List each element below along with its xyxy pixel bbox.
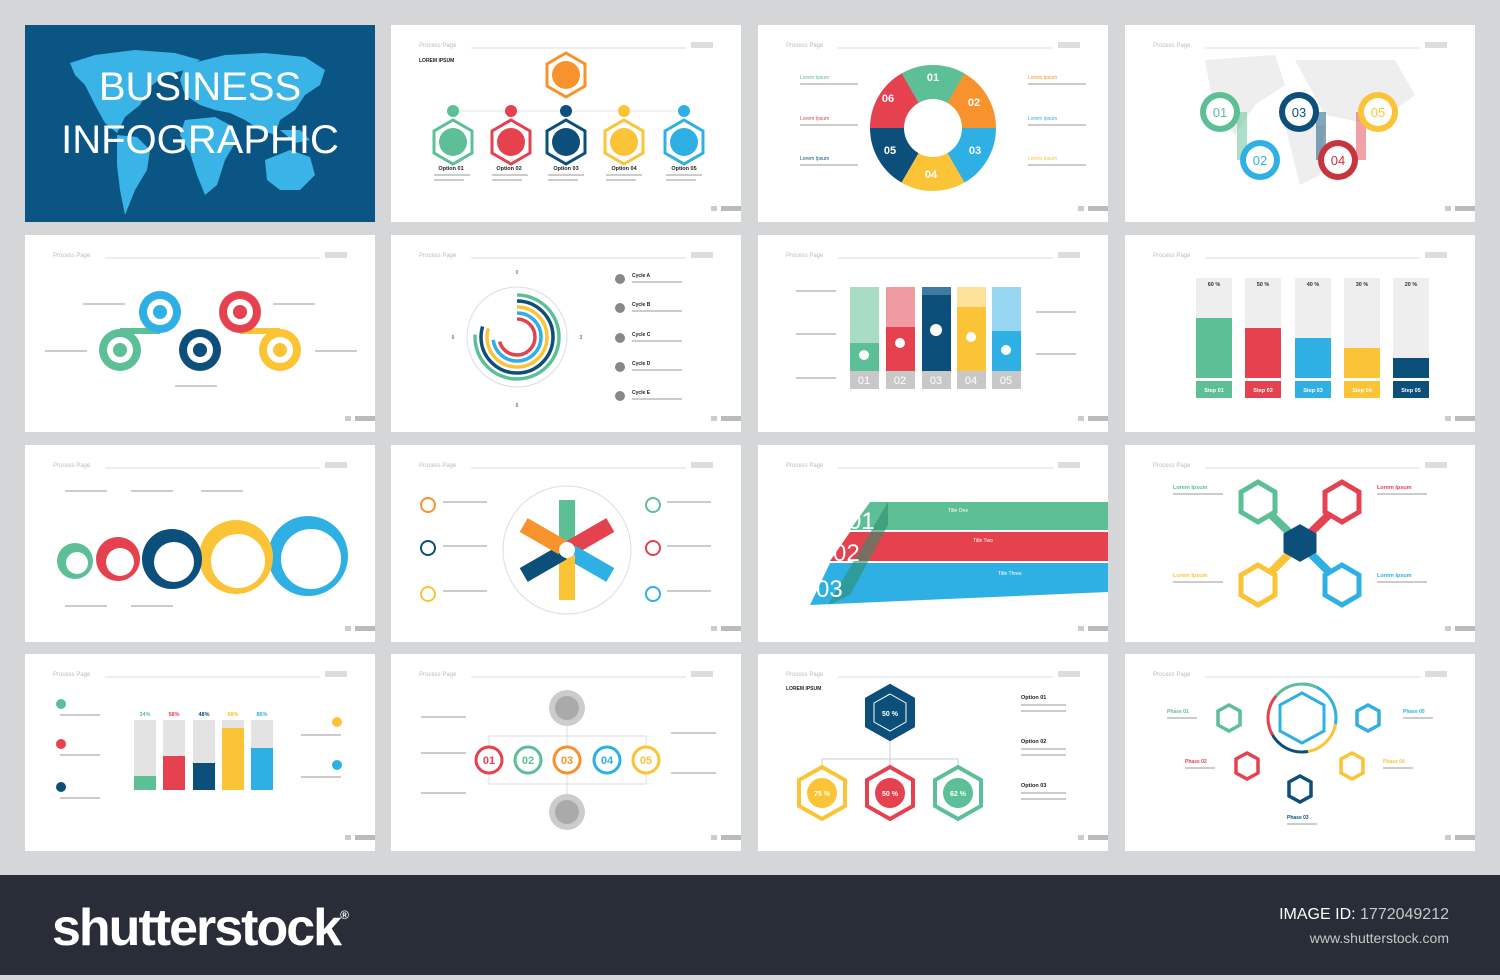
slide 16: phase hexagons: Phase 04 <box>1383 759 1405 765</box>
bars <box>1196 278 1429 378</box>
side texts: Lorem Ipsum <box>800 75 829 81</box>
slide 4: map circles: Process Page <box>1153 43 1191 49</box>
slide 13: bar chart: Process Page <box>53 672 91 678</box>
numbered circles: 05 <box>640 755 652 767</box>
slide 8: step bars: 50 % <box>1257 282 1269 288</box>
hexagons: 62 % <box>950 791 967 798</box>
slide 15: percentage hexagons <box>758 654 1108 851</box>
slide 13: bar chart: 34% <box>139 712 151 718</box>
slide 3: cycle ring <box>758 25 1108 222</box>
top hexagon <box>547 53 585 97</box>
segment numbers: 03 <box>969 145 981 157</box>
slide 1: title <box>25 25 375 222</box>
bars <box>134 720 273 790</box>
slide 3: cycle ring: Lorem Ipsum <box>800 156 829 162</box>
slide 8: step bars: Step 02 <box>1253 388 1273 394</box>
slide 11: pyramid ribbons: 03 <box>816 576 843 603</box>
slide 16: phase hexagons: Phase 05 <box>1403 709 1425 715</box>
option labels: Option 05 <box>671 166 697 172</box>
slide 6: radial cycles: 3 <box>580 335 583 341</box>
segment numbers: 01 <box>927 72 939 84</box>
slide 11: pyramid ribbons: Title Two <box>973 538 993 544</box>
option labels <box>438 166 697 172</box>
slide 15: percentage hexagons: Option 03 <box>1021 783 1046 789</box>
cycle list: Cycle A <box>632 273 651 279</box>
slide 11: pyramid ribbons: Process Page <box>786 463 824 469</box>
slide 12: cross hexagons: Lorem Ipsum <box>1377 485 1412 491</box>
slide 12: cross hexagons: Lorem Ipsum <box>1377 573 1412 579</box>
slide 8: step bars: Step 04 <box>1352 388 1373 394</box>
slide 2: options hexagons: Process Page <box>419 43 457 49</box>
step labels <box>1196 381 1429 398</box>
hexagons: 50 % <box>882 711 899 718</box>
option labels: Option 02 <box>496 166 522 172</box>
slide 2: options hexagons: LOREM IPSUM <box>419 58 454 64</box>
slide 3: cycle ring: Process Page <box>786 43 824 49</box>
slide 3: cycle ring: Lorem Ipsum <box>800 116 829 122</box>
slide 9: growing circles <box>25 445 375 642</box>
slide 8: step bars: Process Page <box>1153 253 1191 259</box>
slide 8: step bars: 40 % <box>1307 282 1319 288</box>
slide 15: percentage hexagons: LOREM IPSUM <box>786 686 821 692</box>
world map <box>70 50 325 215</box>
slide 7: column bars <box>758 235 1108 432</box>
slide 14: numbered circles row: Process Page <box>419 672 457 678</box>
slide 15: percentage hexagons: Option 02 <box>1021 739 1046 745</box>
hexagons <box>1241 482 1359 605</box>
slide 15: percentage hexagons: Option 01 <box>1021 695 1046 701</box>
gray circles <box>549 690 585 830</box>
slide 11: pyramid ribbons: 02 <box>833 540 860 567</box>
slide 16: phase hexagons: Phase 02 <box>1185 759 1207 765</box>
slide 1: title: INFOGRAPHIC <box>61 118 339 162</box>
ring segments <box>870 65 996 191</box>
slide 8: step bars: 60 % <box>1208 282 1220 288</box>
slide 8: step bars: Step 05 <box>1401 388 1421 394</box>
slide 5: chain circles <box>25 235 375 432</box>
slide 13: bar chart: 48% <box>198 712 210 718</box>
title text: BUSINESS <box>99 65 301 109</box>
cycle list <box>632 273 651 396</box>
numbered circles: 05 <box>1371 105 1385 120</box>
slide 5: chain circles: Process Page <box>53 253 91 259</box>
slide 2: options hexagons <box>391 25 741 222</box>
numbered circles: 02 <box>522 755 534 767</box>
slide 7: column bars: 05 <box>1000 375 1012 387</box>
chain <box>99 291 301 371</box>
segment numbers: 05 <box>884 145 896 157</box>
slide 8: step bars: Step 01 <box>1204 388 1224 394</box>
bars <box>850 287 1021 371</box>
numbered circles: 03 <box>1292 105 1306 120</box>
hexagons <box>799 686 981 819</box>
numbered circles: 04 <box>601 755 614 767</box>
numbered circles: 02 <box>1253 153 1267 168</box>
slide 6: radial cycles <box>391 235 741 432</box>
cycle list: Cycle B <box>632 302 651 308</box>
slide 12: cross hexagons <box>1125 445 1475 642</box>
slide 8: step bars: Step 03 <box>1303 388 1323 394</box>
option labels: Option 03 <box>553 166 579 172</box>
slide 3: cycle ring: Lorem Ipsum <box>1028 156 1057 162</box>
slide 10: star objects: Process Page <box>419 463 457 469</box>
slide 16: phase hexagons: Phase 01 <box>1167 709 1189 715</box>
slide 6: radial cycles: 9 <box>452 335 455 341</box>
image id: IMAGE ID: 1772049212 <box>1279 906 1449 923</box>
segment numbers: 02 <box>968 97 980 109</box>
logo: ® <box>340 908 349 922</box>
numbered circles <box>1200 92 1398 180</box>
option labels: Option 04 <box>611 166 638 172</box>
concentric arcs <box>467 287 567 387</box>
star <box>520 500 614 600</box>
slide 13: bar chart: 86% <box>256 712 268 718</box>
slide 3: cycle ring: Lorem Ipsum <box>1028 116 1057 122</box>
slide 12: cross hexagons: Lorem Ipsum <box>1173 573 1208 579</box>
segment numbers: 06 <box>882 93 894 105</box>
slide 7: column bars: 01 <box>858 375 870 387</box>
numbered circles: 03 <box>561 755 573 767</box>
slide 11: pyramid ribbons: Title One <box>948 508 968 514</box>
slide 11: pyramid ribbons: 01 <box>848 508 875 535</box>
option labels: Option 01 <box>438 166 464 172</box>
numbered circles: 01 <box>483 755 495 767</box>
slide 4: map circles <box>1125 25 1475 222</box>
slide 7: column bars: 02 <box>894 375 906 387</box>
slide 7: column bars: Process Page <box>786 253 824 259</box>
slide 3: cycle ring: Lorem Ipsum <box>1028 75 1057 81</box>
cycle list: Cycle E <box>632 390 651 396</box>
slide 13: bar chart: 58% <box>168 712 180 718</box>
slide 7: column bars: 04 <box>965 375 977 387</box>
slide 9: growing circles: Process Page <box>53 463 91 469</box>
option hexagons <box>434 105 703 164</box>
slide 16: phase hexagons: Phase 03 <box>1287 815 1309 821</box>
numbered circles: 04 <box>1331 153 1345 168</box>
slide 6: radial cycles: 0 <box>516 270 519 276</box>
ribbons <box>810 502 1108 605</box>
slide 8: step bars: 20 % <box>1405 282 1417 288</box>
hexagons: 75 % <box>814 791 831 798</box>
slide 12: cross hexagons: Lorem Ipsum <box>1173 485 1208 491</box>
url: www.shutterstock.com <box>1309 930 1449 946</box>
slide 8: step bars: 30 % <box>1356 282 1368 288</box>
segment numbers: 04 <box>925 169 938 181</box>
slide 11: pyramid ribbons <box>758 445 1108 642</box>
slide 16: phase hexagons: Process Page <box>1153 672 1191 678</box>
slide 13: bar chart: 98% <box>227 712 239 718</box>
logo: shutterstock <box>52 899 340 957</box>
phase hexagons <box>1218 705 1379 802</box>
segment numbers <box>882 72 981 181</box>
slide 13: bar chart <box>25 654 375 851</box>
footer bar <box>0 875 1500 975</box>
cycle list: Cycle C <box>632 332 651 338</box>
slide 12: cross hexagons: Process Page <box>1153 463 1191 469</box>
slide 6: radial cycles: Process Page <box>419 253 457 259</box>
slide 7: column bars: 03 <box>930 375 942 387</box>
numbered circles <box>476 747 659 773</box>
slide 6: radial cycles: 6 <box>516 403 519 409</box>
slide 11: pyramid ribbons: Title Three <box>998 571 1022 577</box>
hexagons: 50 % <box>882 791 899 798</box>
cycle list: Cycle D <box>632 361 651 367</box>
slide 15: percentage hexagons: Process Page <box>786 672 824 678</box>
slide 8: step bars <box>1125 235 1475 432</box>
slide 10: star objects <box>391 445 741 642</box>
slide 16: phase hexagons <box>1125 654 1475 851</box>
central ring <box>1254 670 1350 766</box>
slide 14: numbered circles row <box>391 654 741 851</box>
numbered circles: 01 <box>1213 105 1227 120</box>
